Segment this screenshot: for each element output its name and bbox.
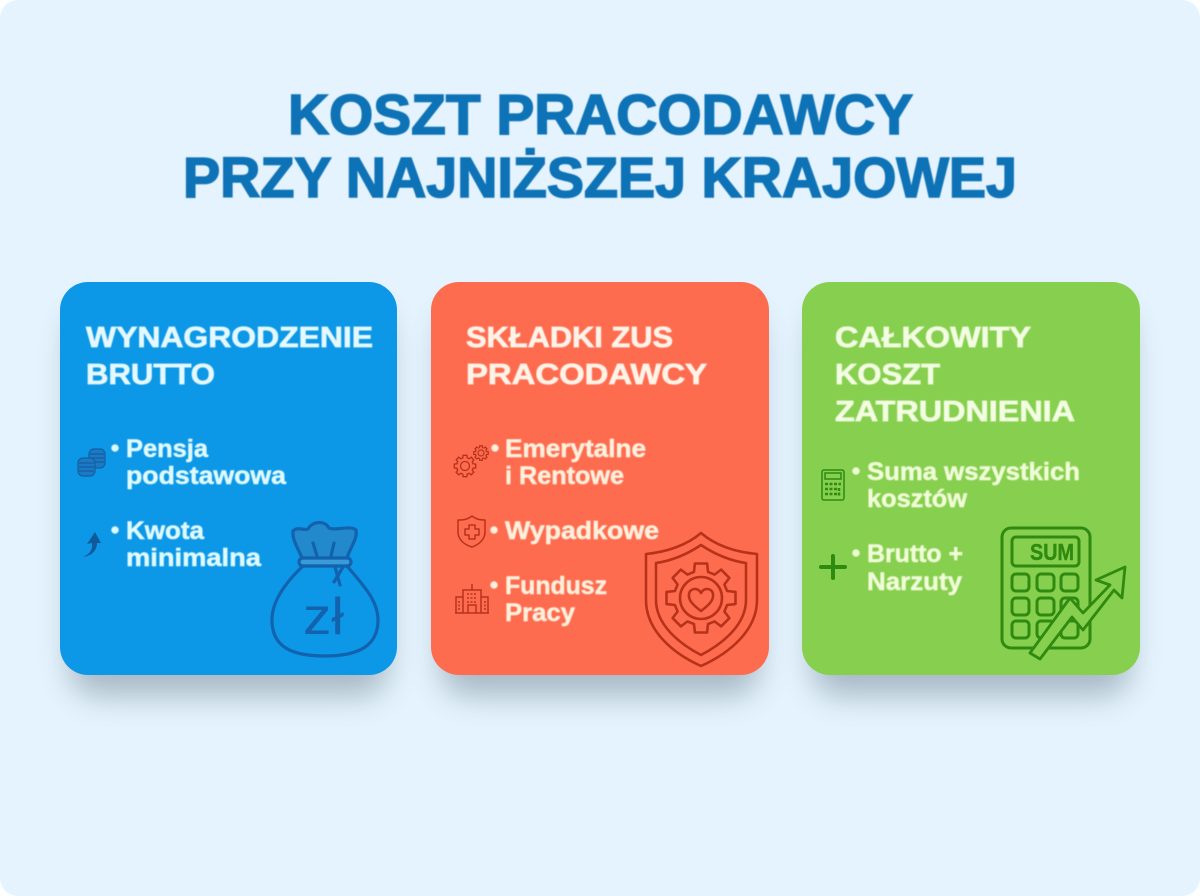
heading: składki zus pracodawcy: PRACODAWCY — [466, 359, 707, 391]
heading: składki zus pracodawcy: SKŁADKI ZUS — [466, 322, 673, 354]
bullet text: fundusz pracy — [490, 572, 607, 627]
heading: całkowity koszt zatrudnienia: CAŁKOWITY — [835, 322, 1031, 354]
icon label: sum on display: SUM — [1030, 539, 1074, 565]
title: PRZY NAJNIŻSZEJ KRAJOWEJ — [183, 146, 1017, 210]
icon label: zł on bag: zł — [303, 588, 344, 646]
heading: składki zus pracodawcy — [466, 322, 707, 391]
bullet text: wypadkowe: Wypadkowe — [505, 517, 659, 545]
bullet text: brutto + narzuty — [852, 540, 963, 596]
heading: wynagrodzenie brutto: BRUTTO — [86, 359, 215, 391]
bullet text: pensja podstawowa — [112, 435, 287, 490]
bullet text: pensja podstawowa: Pensja — [126, 435, 209, 463]
icon: gears — [454, 446, 488, 477]
bullet text: kwota minimalna: Kwota — [126, 517, 205, 545]
icon: calculator with rising arrow — [1002, 528, 1125, 659]
icon: small calculator — [822, 470, 844, 500]
bullet text: kwota minimalna: minimalna — [126, 544, 262, 572]
bullet text: fundusz pracy: Pracy — [505, 599, 575, 627]
icon: shield with cross — [458, 516, 485, 547]
icon: shield with gear and heart — [646, 533, 757, 666]
bullet text: brutto + narzuty: Brutto + — [867, 540, 963, 568]
heading: całkowity koszt zatrudnienia: KOSZT — [835, 359, 940, 391]
heading: wynagrodzenie brutto: WYNAGRODZENIE — [86, 322, 373, 354]
title: KOSZT PRACODAWCY — [288, 83, 913, 147]
heading: wynagrodzenie brutto — [86, 322, 373, 391]
panel: całkowity koszt zatrudnienia — [802, 282, 1140, 696]
title — [183, 83, 1017, 210]
icon: coins — [78, 449, 105, 476]
bullet text: suma wszystkich kosztów: Suma wszystkich — [867, 458, 1080, 486]
bullet text: emerytalne i rentowe — [492, 435, 646, 490]
panel: składki zus pracodawcy — [431, 282, 769, 696]
heading: całkowity koszt zatrudnienia — [835, 322, 1075, 428]
bullet text: brutto + narzuty: Narzuty — [867, 568, 962, 596]
bullet text: emerytalne i rentowe: Emerytalne — [505, 435, 646, 463]
bullet text: suma wszystkich kosztów — [852, 458, 1080, 513]
icon: plus — [821, 556, 845, 578]
bullet text: suma wszystkich kosztów: kosztów — [867, 485, 968, 513]
bullet text: pensja podstawowa: podstawowa — [126, 462, 287, 490]
bullet text: emerytalne i rentowe: i Rentowe — [505, 462, 624, 490]
bullet text: kwota minimalna — [112, 517, 262, 572]
icon: money bag — [272, 522, 378, 656]
panel: wynagrodzenie brutto — [60, 282, 397, 696]
icon: up arrow — [83, 532, 101, 557]
bullet text: fundusz pracy: Fundusz — [505, 572, 607, 600]
icon: office building — [455, 584, 489, 613]
heading: całkowity koszt zatrudnienia: ZATRUDNIENIA — [835, 396, 1075, 428]
